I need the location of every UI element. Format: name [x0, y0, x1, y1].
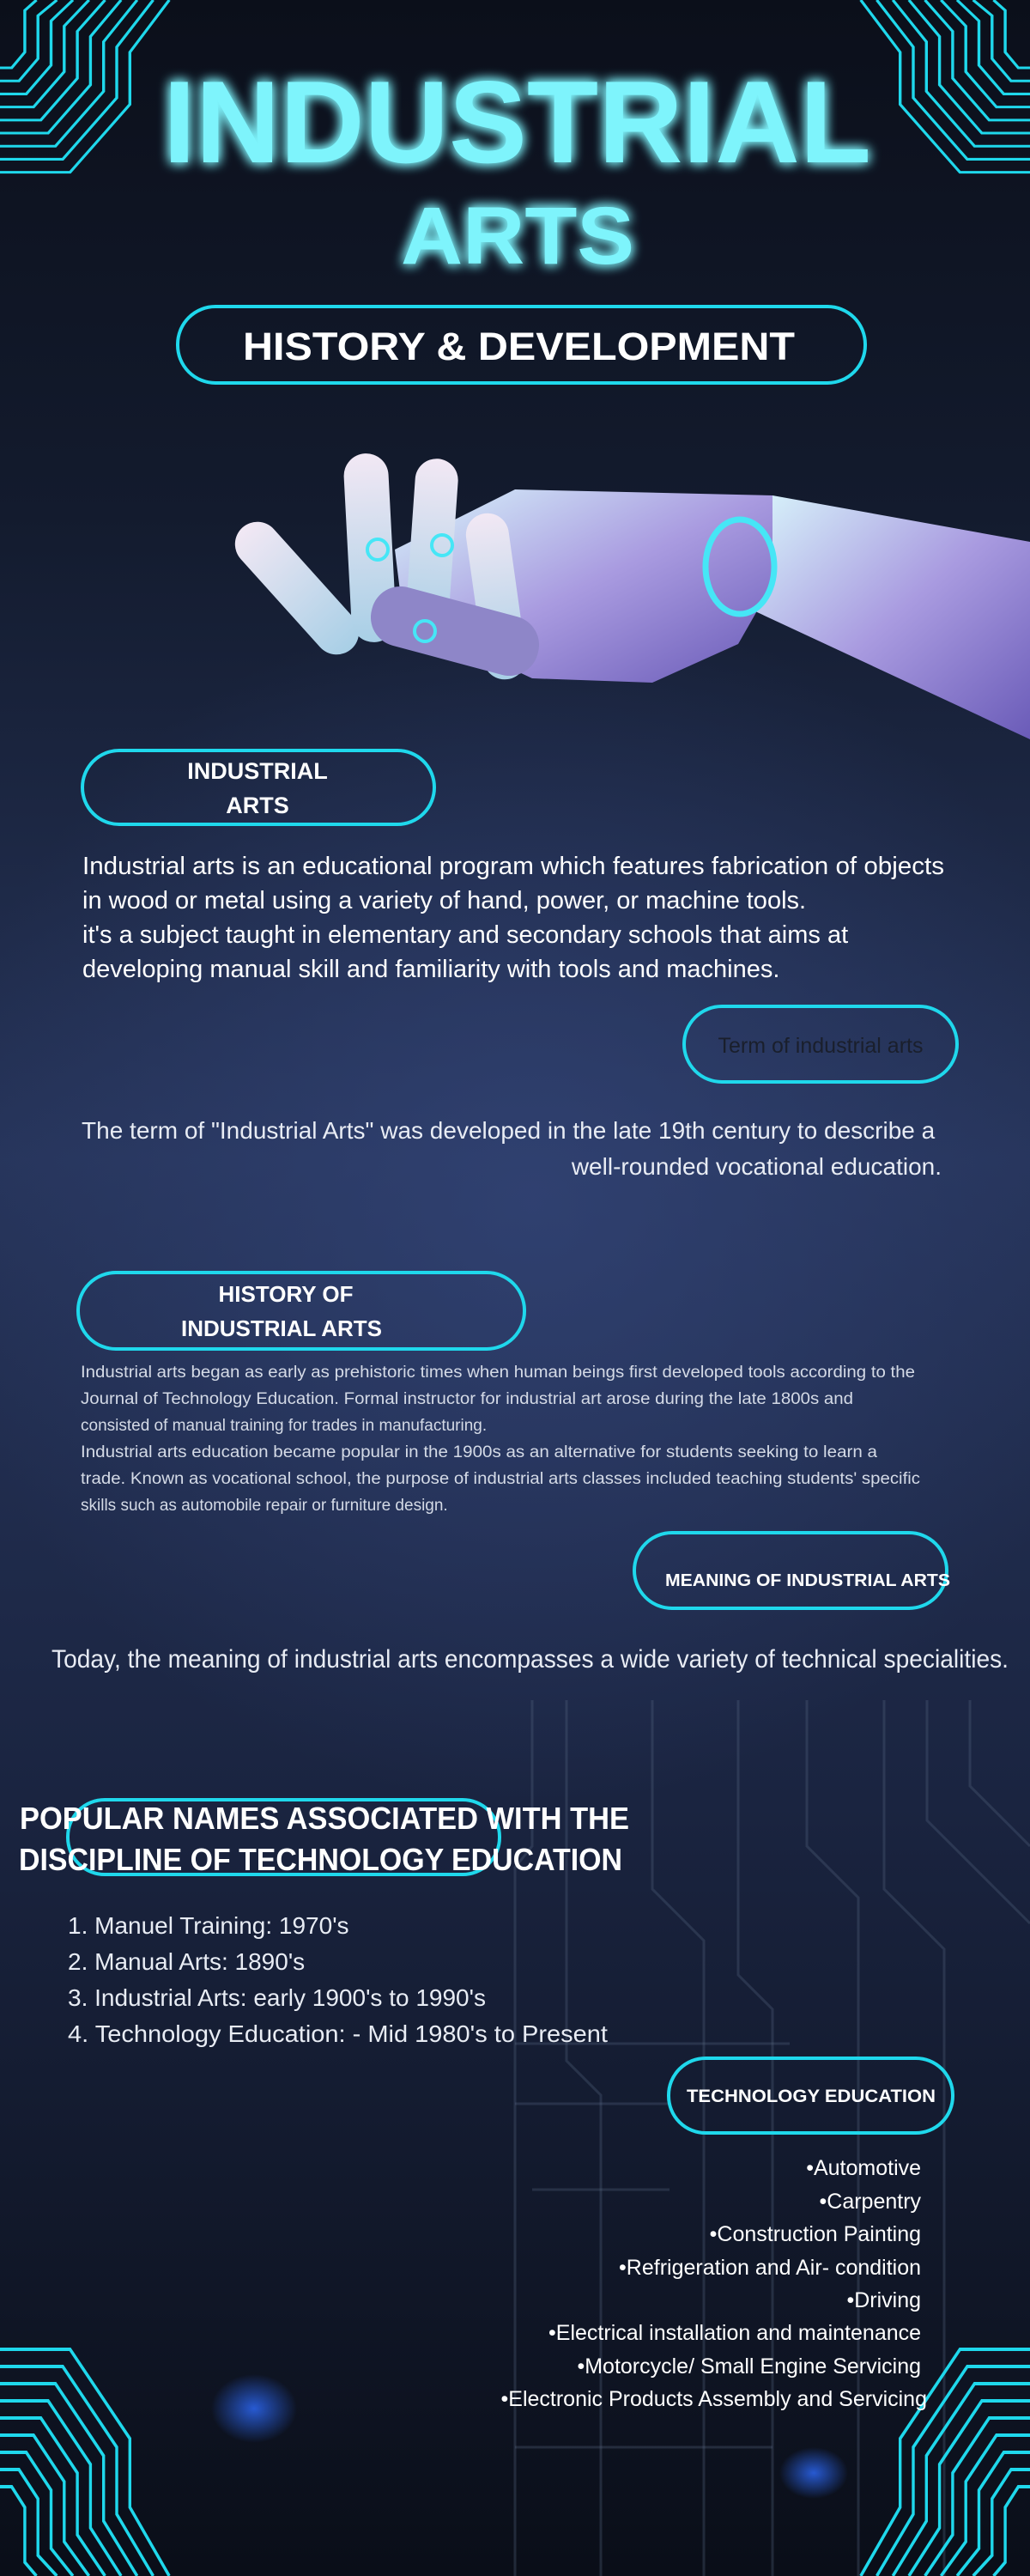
subtitle pill: history & development [178, 307, 865, 383]
panel: popular names [19, 1800, 629, 2047]
pill heading: history of industrial arts [78, 1273, 524, 1349]
list: tech education areas: •Construction Painting [710, 2222, 921, 2246]
list: tech education areas: •Electronic Products Assembly and Servicing [501, 2387, 927, 2411]
pill heading: meaning of industrial arts [634, 1533, 950, 1608]
list: names: 3. Industrial Arts: early 1900's to 1990's [68, 1984, 486, 2011]
circuit corner: top-right [861, 0, 1030, 173]
heading: popular names: DISCIPLINE OF TECHNOLOGY EDUCATION [19, 1842, 622, 1877]
panel: meaning [52, 1533, 1009, 1674]
list: tech education areas: •Electrical installation and maintenance [548, 2321, 921, 2345]
text block: definition: it's a subject taught in elementary and secondary schools that aims at [82, 921, 848, 949]
text block: definition: Industrial arts is an educational program which features fabrication of objects [82, 853, 944, 880]
pill heading: term [684, 1006, 957, 1082]
pill heading: history of industrial arts: INDUSTRIAL ARTS [181, 1315, 382, 1341]
glow spots [211, 2374, 297, 2443]
list: tech education areas: •Refrigeration and Air- condition [619, 2256, 921, 2280]
panel: term of industrial arts [82, 1006, 957, 1180]
text block: history: consisted of manual training for trades in manufacturing. [81, 1417, 487, 1435]
text block: history: skills such as automobile repair or furniture design. [81, 1497, 448, 1515]
text block: history: Industrial arts began as early as prehistoric times when human beings first developed tools according to the [81, 1364, 915, 1382]
pill heading: history of industrial arts: HISTORY OF [218, 1281, 354, 1307]
title: ARTS [401, 191, 634, 282]
pill heading: term: Term of industrial arts [718, 1034, 923, 1058]
pill heading: industrial arts: ARTS [226, 793, 289, 818]
heading: popular names: POPULAR NAMES ASSOCIATED WITH THE [20, 1801, 629, 1836]
list: names: 4. Technology Education: - Mid 1980's to Present [68, 2020, 608, 2047]
list: names: 1. Manuel Training: 1970's [68, 1912, 349, 1939]
subtitle pill: history & development: HISTORY & DEVELOPMENT [243, 325, 795, 368]
pill heading: industrial arts: INDUSTRIAL [187, 758, 328, 784]
list: tech education areas: •Motorcycle/ Small Engine Servicing [577, 2354, 921, 2379]
text block: definition: developing manual skill and familiarity with tools and machines. [82, 956, 779, 983]
list: names: 2. Manual Arts: 1890's [68, 1948, 305, 1975]
list: tech education areas: •Driving [846, 2288, 921, 2312]
title: INDUSTRIAL [163, 57, 871, 187]
text block: definition: in wood or metal using a variety of hand, power, or machine tools. [82, 887, 806, 914]
panel: technology education [501, 2058, 953, 2411]
title [163, 57, 871, 282]
decorative circuit background [515, 1700, 1030, 2576]
pill heading: technology education: TECHNOLOGY EDUCATION [687, 2087, 936, 2106]
text block: history: trade. Known as vocational school, the purpose of industrial arts classes included teaching students' specific [81, 1470, 920, 1488]
list: tech education areas: •Carpentry [820, 2190, 922, 2214]
circuit corner: bottom-left [0, 2349, 169, 2576]
list: tech education areas: •Automotive [806, 2156, 921, 2180]
pill heading: technology education [669, 2058, 953, 2133]
circuit corner: top-left [0, 0, 169, 173]
text block: history: Industrial arts education became popular in the 1900s as an alternative for students seeking to learn a [81, 1443, 877, 1461]
pill heading: meaning of industrial arts: MEANING OF INDUSTRIAL ARTS [665, 1571, 950, 1590]
text block: history: Journal of Technology Education. Formal instructor for industrial art arose during the late 1800s and [81, 1390, 853, 1408]
text block: term: well-rounded vocational education. [571, 1153, 942, 1180]
pill outline [68, 1800, 500, 1874]
text block: term: The term of "Industrial Arts" was developed in the late 19th century to describe a [82, 1117, 936, 1144]
pill heading: industrial arts [82, 750, 434, 824]
panel: history [78, 1273, 924, 1515]
circuit corner: bottom-right [861, 2349, 1030, 2576]
image: robot hand [226, 453, 1030, 739]
panel: industrial arts [82, 750, 951, 983]
heading: popular names [19, 1801, 629, 1877]
